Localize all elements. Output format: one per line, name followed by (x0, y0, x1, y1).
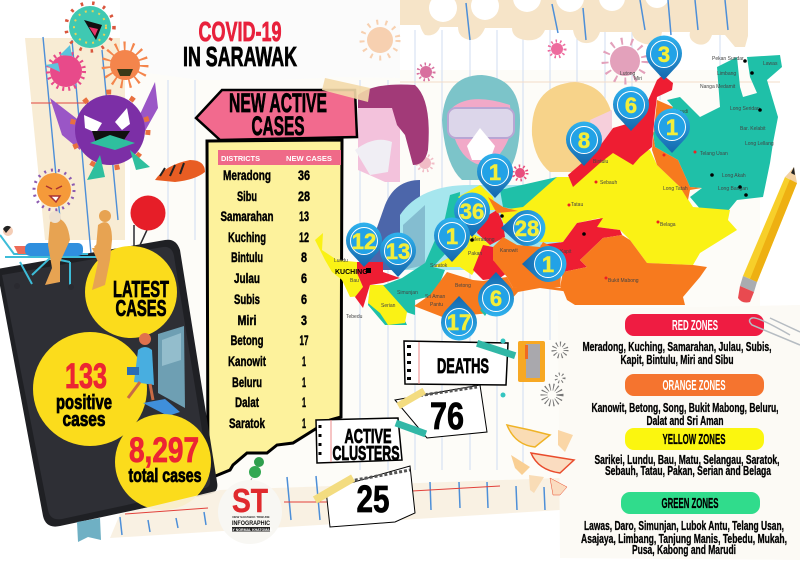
map place labels: Simunjan (397, 290, 418, 296)
red zones (582, 314, 772, 367)
map place labels (334, 56, 778, 320)
map pin: Sibu 28: 28 (515, 216, 539, 241)
title: COVID-19 (198, 16, 282, 47)
table rows: 12 (299, 229, 309, 245)
table rows: Beluru (232, 374, 262, 390)
map place labels: Bau (350, 278, 359, 284)
green zones Mukah (500, 177, 557, 210)
icon: pencil sharpener (518, 341, 545, 382)
map pin: Kuching 12: 12 (352, 229, 376, 254)
map place labels: Long Tatah (663, 186, 688, 192)
positive cases circle (33, 332, 147, 446)
table rows: Dalat (235, 394, 259, 410)
newspaper logo: ST (232, 482, 268, 519)
table rows: 1 (302, 353, 306, 369)
map pin: Julau 6 (478, 272, 514, 316)
yellow zones: YELLOW ZONES (662, 431, 726, 448)
map pin: Bintulu 8 (566, 122, 602, 166)
green zones: Pusa, Kabong and Marudi (632, 543, 736, 557)
table rows: Sibu (237, 188, 257, 204)
map place labels: Betong (455, 283, 471, 289)
map pin: Dalat 1 (477, 154, 513, 198)
map pin: Bintulu 8: 8 (578, 128, 590, 153)
yellow Lundu and Bau (315, 233, 363, 297)
beige strip paper left (25, 37, 125, 265)
icon: teal virus (66, 3, 114, 51)
positive cases circle: cases (62, 409, 106, 431)
deaths count card (395, 385, 487, 438)
stretcher with patient and health workers (0, 210, 112, 290)
table rows: 1 (302, 394, 306, 410)
map place labels: Nanga Medamit (700, 84, 736, 90)
active clusters card: ACTIVE (344, 426, 392, 448)
map place labels: Lutong (620, 71, 636, 77)
map pin: Dalat 1: 1 (489, 160, 501, 185)
newspaper logo: INFOGRAPHIC (232, 521, 271, 527)
positive cases circle: positive (56, 392, 112, 414)
map of Sarawak (315, 55, 782, 325)
map place labels: Long Bangan (718, 186, 748, 192)
map pin: Meradong 36: 36 (460, 199, 484, 224)
red Julau (473, 245, 507, 280)
map place labels: Sri Aman (425, 294, 446, 300)
map place labels: Tatau (571, 202, 583, 208)
map pin: Kuching 12 (346, 223, 382, 267)
torn title paper (120, 0, 400, 80)
table rows: Meradong (223, 167, 271, 183)
map place labels: Serian (381, 303, 396, 309)
map place labels: Bar. Kelabit (740, 126, 766, 132)
pencil shavings (507, 425, 574, 495)
table rows: Subis (234, 291, 260, 307)
illustration: blonde woman (532, 82, 612, 172)
map pin: Betong 17 (441, 296, 477, 340)
decorative pale virus icons (362, 22, 645, 180)
map pin: Subis 6 (613, 87, 649, 131)
red zones: Kapit, Bintulu, Miri and Sibu (620, 353, 734, 367)
balloon pin (130, 196, 166, 258)
newspaper logo: BY NORMAL KHATOMAS (230, 528, 273, 532)
map pin: Subis 6: 6 (625, 93, 637, 118)
map place labels: Bukit Mabong (608, 278, 639, 284)
map place labels: Bintulu (593, 159, 609, 165)
table rows: Samarahan (220, 208, 274, 224)
table rows: Miri (238, 312, 256, 328)
icon: green push pin (246, 457, 264, 490)
table rows: Bintulu (231, 249, 263, 265)
illustration: man with mask (355, 84, 429, 270)
zones panel (558, 305, 800, 560)
notebook paper background (130, 30, 780, 490)
deaths card (404, 340, 516, 385)
table rows: 8 (301, 249, 307, 265)
red Meradong (477, 210, 505, 245)
map place labels: KUCHING (335, 269, 368, 276)
map place labels: Lundu (334, 258, 348, 264)
map pin: Meradong 36 (454, 193, 490, 237)
illustration: nurse in hood (400, 75, 560, 270)
table rows: 28 (298, 188, 310, 204)
table rows: 1 (302, 374, 306, 390)
icon: orange virus (106, 46, 144, 84)
map pin: Julau 6: 6 (490, 286, 502, 311)
newspaper logo (218, 480, 282, 544)
map place labels: Pakan (468, 251, 482, 257)
map place labels: Meradong (472, 237, 495, 243)
illustration: girl at door (127, 326, 185, 416)
table rows: 6 (301, 270, 307, 286)
deaths card: DEATHS (437, 355, 489, 378)
map place labels: Telang Usan (700, 151, 728, 157)
red Kuching (355, 262, 400, 308)
orange zones (592, 374, 778, 428)
map pin: Samarahan 13 (380, 233, 416, 277)
map place labels: Sebauh (600, 180, 617, 186)
new cases table paper (207, 140, 342, 482)
green zones (581, 492, 787, 557)
active clusters count card (313, 466, 415, 527)
map place labels: Limbang (717, 71, 736, 77)
latest cases circle (85, 246, 177, 338)
yellow Serian (368, 285, 407, 325)
total cases circle: total cases (128, 466, 202, 487)
map place labels: Belaga (660, 222, 676, 228)
map place labels: Kanowit (500, 248, 518, 254)
map place labels: Miri (634, 76, 642, 82)
new active cases banner (196, 88, 357, 141)
table rows: 1 (302, 415, 306, 431)
green zones Simunjan (368, 192, 460, 325)
icon: pink winged virus (45, 45, 84, 89)
map pin: Saratok 1 (434, 218, 470, 262)
table rows: Betong (230, 332, 264, 348)
table rows: Julau (234, 270, 260, 286)
map pin: Saratok 1: 1 (446, 224, 458, 249)
red Kapit (540, 218, 622, 272)
yellow zones (594, 428, 780, 478)
newspaper logo: NEW SARAWAK TRIBUNE (232, 515, 270, 519)
map place labels: Tebedu (346, 314, 363, 320)
map pin: Samarahan 13: 13 (386, 239, 410, 264)
map place labels: Pantu (430, 302, 443, 308)
map place labels: Pekan Sundar (712, 56, 744, 62)
icon: paperclip (750, 318, 800, 345)
total cases circle (115, 414, 211, 510)
table rows: 13 (299, 208, 309, 224)
map pin: Betong 17: 17 (447, 310, 471, 335)
map place labels: Marudi (673, 109, 688, 115)
map pin: Sibu 28 (501, 210, 545, 246)
map pin: Kanowit 1: 1 (542, 252, 554, 277)
table rows: 36 (298, 167, 310, 183)
icon: pencil (738, 167, 797, 302)
title (183, 16, 297, 72)
new active cases banner: CASES (252, 111, 304, 141)
table header: NEW CASES (286, 154, 332, 163)
icon: purple bat virus (50, 82, 158, 180)
map pin: Miri 3: 3 (658, 42, 670, 67)
total cases circle: 8,297 (129, 431, 199, 470)
table rows: 6 (301, 291, 307, 307)
map place labels: Long Seridan (730, 106, 760, 112)
map place labels: Long Akah (722, 173, 746, 179)
latest cases circle: LATEST (113, 276, 169, 302)
map pin: Beluru 1: 1 (666, 115, 678, 140)
map place labels: Long Lellang (745, 141, 774, 147)
icon: orange caterpillar virus (155, 160, 205, 182)
tape on banner (322, 78, 370, 102)
map pin: Beluru 1 (654, 109, 690, 153)
positive cases circle: 133 (65, 357, 107, 396)
table rows: Saratok (229, 415, 265, 431)
orange zones (652, 100, 702, 200)
map pin: Miri 3 (646, 36, 682, 80)
active clusters card: CLUSTERS (332, 443, 400, 465)
bottom beige ruled paper (77, 476, 560, 542)
map place labels: Saratok (430, 263, 448, 269)
pencil graphite dust (500, 338, 566, 403)
table header (218, 150, 341, 165)
orange zones: Dalat and Sri Aman (646, 414, 724, 428)
map pin: Kanowit 1 (522, 246, 566, 282)
red Miri Bintulu (568, 75, 673, 187)
new active cases banner: NEW ACTIVE (229, 88, 327, 118)
deaths count card: 76 (430, 396, 464, 438)
green zones: GREEN ZONES (662, 495, 718, 512)
table rows: Kuching (228, 229, 266, 245)
table rows: 17 (300, 332, 309, 348)
active clusters card (316, 418, 402, 465)
icon: small orange virus (34, 170, 74, 210)
orange zones: ORANGE ZONES (662, 377, 726, 394)
map place labels: Kapit (560, 249, 572, 255)
phone (0, 240, 217, 527)
red zones: RED ZONES (672, 317, 718, 334)
map place labels: Lawas (763, 61, 778, 67)
table rows: 3 (301, 312, 307, 328)
top beige scalloped paper (400, 0, 748, 47)
green zones east (653, 55, 782, 217)
yellow zones north (500, 150, 737, 265)
table header: DISTRICTS (221, 154, 260, 163)
table rows: Kanowit (228, 353, 266, 369)
active clusters count card: 25 (356, 479, 390, 521)
table rows (220, 167, 310, 431)
latest cases circle: CASES (116, 295, 166, 321)
title: IN SARAWAK (183, 41, 297, 72)
